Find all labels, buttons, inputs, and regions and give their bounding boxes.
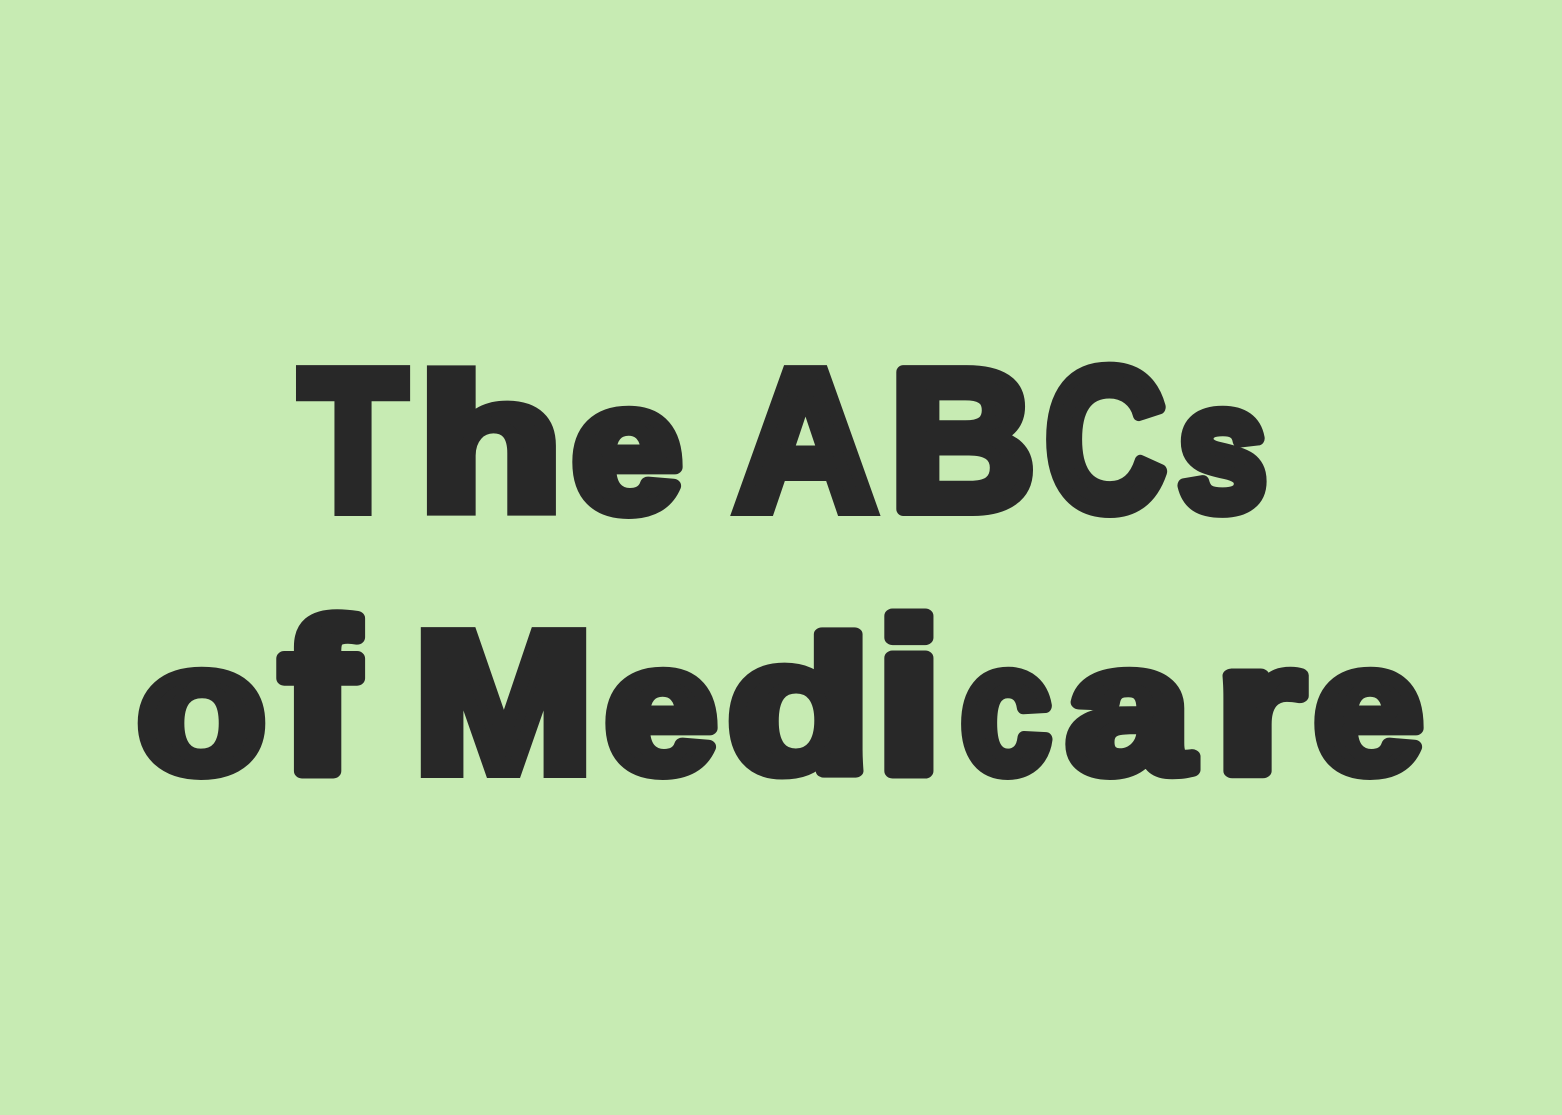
title line 2: of Medicare: o <box>138 609 265 810</box>
title line 1: The ABCs: T <box>300 329 406 552</box>
title line 1: The ABCs: B <box>890 330 1035 552</box>
title line 2: of Medicare <box>138 578 1423 817</box>
title line 2: of Medicare: e <box>1314 607 1423 809</box>
title line 2: of Medicare: e <box>606 609 716 810</box>
title line 1: The ABCs: A <box>735 329 876 551</box>
title line 1: The ABCs: h <box>419 339 562 550</box>
title line 1: The ABCs: C <box>1045 329 1166 552</box>
title line 2: of Medicare: c <box>961 609 1051 810</box>
title line 2: of Medicare: r <box>1217 608 1303 809</box>
title line 2: of Medicare: i <box>876 578 942 817</box>
title line 1: The ABCs: s <box>1178 348 1267 547</box>
title line 1: The ABCs <box>300 329 1267 552</box>
title line 2: of Medicare: M <box>414 591 593 813</box>
title line 2: of Medicare: a <box>1068 608 1193 809</box>
title line 2: of Medicare: f <box>280 578 358 816</box>
title <box>138 329 1423 817</box>
title line 1: The ABCs: e <box>572 347 682 548</box>
title line 2: of Medicare: d <box>727 601 871 812</box>
